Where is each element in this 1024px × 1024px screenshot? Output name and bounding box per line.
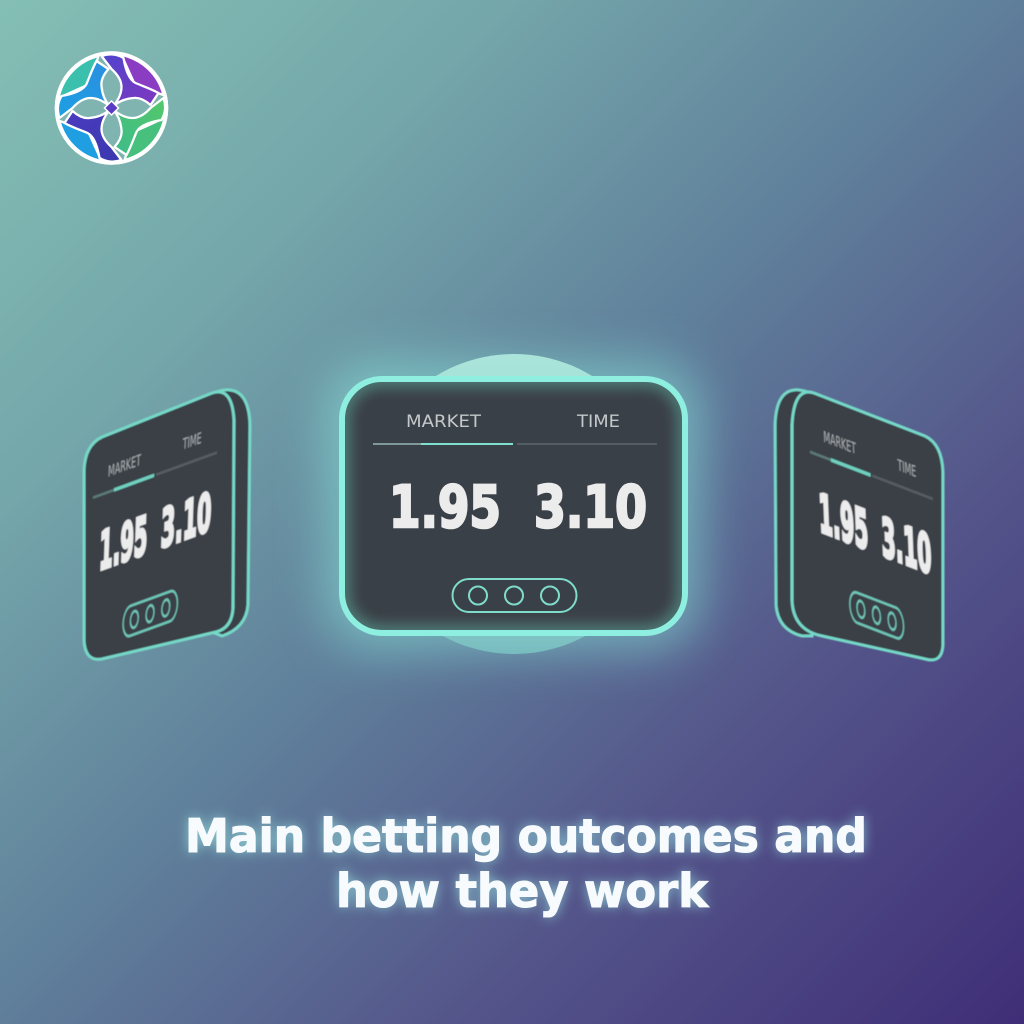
tab labels: MARKET — [406, 412, 482, 431]
dome behind centre card — [364, 354, 664, 654]
logo: purple wedge — [122, 55, 164, 95]
odds values: 1.95 — [389, 473, 501, 541]
logo: centre diamond — [104, 101, 118, 115]
pager pill — [452, 579, 576, 612]
card face — [792, 392, 943, 660]
card content: 1.95 — [98, 504, 148, 583]
card content — [809, 422, 939, 654]
panel: right tilted card — [775, 390, 943, 660]
card face — [84, 392, 234, 659]
title: how they work — [336, 864, 709, 918]
logo — [56, 53, 166, 163]
logo: indigo band — [64, 110, 122, 162]
tab underline — [373, 443, 657, 445]
card content: 3.10 — [160, 481, 212, 561]
logo: green wedge — [124, 118, 164, 160]
card content: TIME — [182, 429, 202, 454]
card back edge — [212, 390, 250, 636]
title: Main betting outcomes and — [185, 809, 867, 863]
logo: teal wedge — [58, 56, 98, 98]
odds values: 3.10 — [534, 473, 647, 541]
card content: 1.95 — [818, 483, 869, 564]
card content: TIME — [897, 456, 916, 481]
tab labels: TIME — [576, 412, 620, 431]
panel: left tilted card — [84, 390, 250, 659]
title: Main betting outcomes and — [185, 809, 867, 863]
title — [185, 809, 867, 918]
panel: centre odds card — [342, 379, 685, 633]
glow behind centre card — [325, 362, 702, 650]
card content — [88, 423, 218, 651]
odds values — [389, 473, 647, 541]
title: how they work — [336, 864, 709, 918]
tab labels — [406, 412, 620, 431]
card body — [342, 379, 685, 633]
logo: blue band — [58, 61, 110, 118]
card content: MARKET — [823, 428, 857, 458]
logo: purple band — [102, 54, 158, 106]
logo: green band — [114, 98, 165, 155]
card content: MARKET — [108, 451, 142, 481]
card content: 3.10 — [880, 507, 933, 588]
logo: blue wedge — [60, 121, 102, 161]
card back edge — [775, 390, 812, 636]
